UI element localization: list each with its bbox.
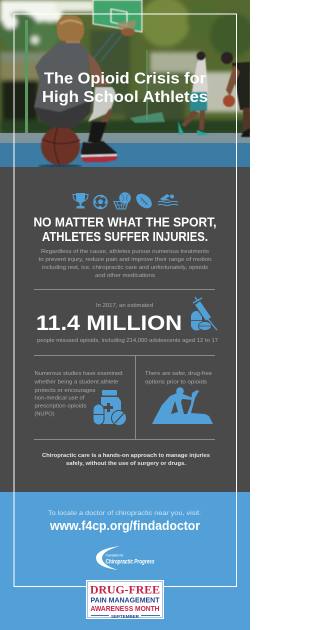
text block: treatments: to prevent injury, reduce pain and improve their range of motion	[38, 257, 212, 263]
heading: no matter what the sport: NO MATTER WHAT THE SPORT,	[34, 214, 216, 230]
icon: swimmer	[158, 194, 178, 206]
stat: 11.4 million: In 2017, an estimated	[96, 303, 153, 309]
white frame	[14, 14, 236, 586]
text block: chiropractic care: safely, without the use of surgery or drugs.	[66, 461, 186, 467]
badge: drug-free pain management awareness month: PAIN MANAGEMENT	[90, 596, 160, 604]
shorts and leg	[88, 87, 116, 122]
neck and head	[66, 40, 80, 44]
icon: basketball and hoop	[114, 192, 131, 209]
icons: sports row	[73, 191, 178, 211]
title	[42, 70, 208, 106]
title: The Opioid Crisis for	[44, 70, 206, 88]
stat: 11.4 million: people misused opioids, including 214,000 adolescents aged 12 to 17	[37, 338, 218, 344]
text block: chiropractic care	[42, 453, 210, 467]
ball	[41, 126, 80, 166]
logo: foundation for chiropractic progress: Foundation for	[106, 554, 124, 558]
badge: drug-free pain management awareness month: DRUG-FREE	[90, 582, 160, 596]
text block: numerous studies: prescription opioids	[34, 404, 87, 410]
badge: drug-free pain management awareness month: AWARENESS MONTH	[90, 604, 160, 613]
icon: chiropractor treating a patient	[152, 387, 213, 424]
badge: drug-free pain management awareness month: SEPTEMBER	[111, 614, 139, 620]
text block: safer options	[145, 371, 212, 386]
heading: no matter what the sport	[34, 214, 216, 244]
text block: chiropractic care: Chiropractic care is a hands-on approach to manage injuries	[42, 453, 210, 459]
dark content background	[0, 167, 250, 492]
text block: treatments	[38, 249, 212, 279]
call to action: To locate a doctor of chiropractic near you, visit:	[48, 510, 201, 517]
arm	[88, 53, 110, 86]
stat: 11.4 million	[36, 303, 218, 344]
call to action: www.f4cp.org/findadoctor	[49, 519, 200, 533]
text block: treatments: and other medications	[95, 273, 155, 279]
icon: syringe and pills	[191, 297, 217, 330]
text block: numerous studies: Numerous studies have examined	[34, 371, 123, 377]
text block: safer options: options prior to opioids	[145, 380, 207, 386]
logo: foundation for chiropractic progress: Chiropractic Progress	[106, 558, 155, 566]
text block: numerous studies: non-medical use of	[34, 396, 85, 402]
photo: boy sitting on a basketball on an outdoor court	[0, 0, 254, 168]
icon: pill bottle and tablets	[93, 390, 126, 426]
text block: numerous studies	[33, 371, 123, 418]
shirt	[34, 42, 94, 112]
title: High School Athletes	[42, 89, 208, 106]
stat: 11.4 million: 11.4 MILLION	[36, 311, 182, 335]
icon: soccer ball	[93, 195, 108, 209]
text block: safer options: There are safer, drug-free	[145, 371, 212, 377]
text block: numerous studies: whether being a student athlete	[33, 380, 118, 386]
text block: treatments: Regardless of the cause, athletes pursue numerous treatments	[41, 249, 209, 255]
call to action	[48, 510, 201, 533]
logo: foundation for chiropractic progress	[96, 546, 155, 570]
text block: numerous studies: protects or encourages	[34, 388, 96, 394]
icon: trophy	[73, 193, 88, 208]
icon: football	[133, 191, 155, 211]
blue footer background	[0, 492, 250, 630]
right players	[191, 56, 208, 100]
text block: treatments: including rest, ice, chiropractic care and unfortunately, opioids	[42, 265, 208, 271]
badge: drug-free pain management awareness month	[86, 580, 164, 620]
text block: numerous studies: (NUPO)	[34, 412, 55, 418]
heading: no matter what the sport: ATHLETES SUFFER INJURIES.	[42, 229, 208, 244]
